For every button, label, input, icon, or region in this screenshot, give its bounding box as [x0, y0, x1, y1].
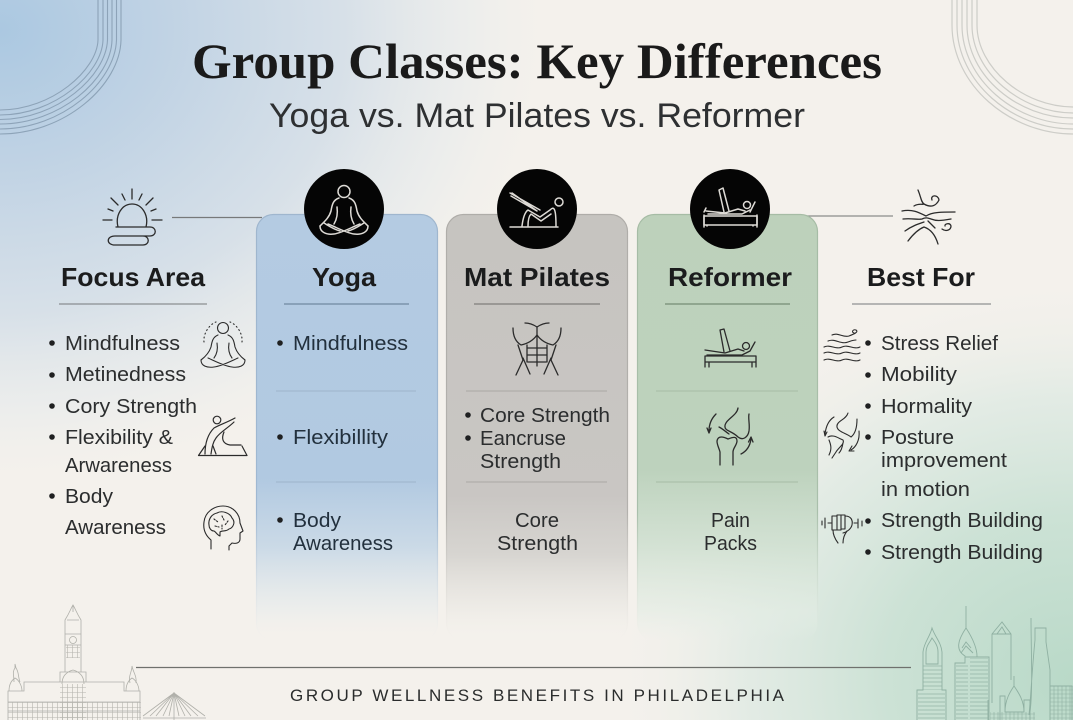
- row: pain packs: [704, 509, 757, 555]
- list: focus items: Body: [65, 485, 114, 508]
- decorative arcs: top right: [952, 0, 1073, 134]
- panel: reformer column: [638, 169, 818, 640]
- heading: best for: Best For: [867, 262, 975, 292]
- icon: breath swirl: [902, 190, 955, 244]
- heading: reformer: Reformer: [668, 262, 792, 292]
- list: best for items: Hormality: [881, 395, 973, 418]
- row: pain packs: Packs: [704, 532, 757, 555]
- icon: meditating figure: [201, 322, 245, 367]
- subtitle: Yoga vs. Mat Pilates vs. Reformer: [269, 97, 805, 135]
- footer divider: [136, 666, 911, 668]
- row: core and endurance: Strength: [480, 450, 561, 473]
- list: best for items: [865, 332, 1043, 564]
- panel: yoga column: [256, 169, 438, 640]
- row: core strength: Strength: [497, 532, 578, 555]
- list: best for items: Posture: [881, 426, 954, 449]
- list: best for items: improvement: [881, 449, 1007, 472]
- connector line: focus area: [172, 216, 262, 218]
- footer text: GROUP WELLNESS BENEFITS IN PHILADELPHIA: [290, 686, 785, 705]
- skyline: bridge: [143, 692, 206, 720]
- list: best for items: Strength Building: [881, 509, 1043, 532]
- icon: seated stretch: [198, 416, 247, 456]
- icon: rising sun on stones: [103, 189, 162, 245]
- icon: yoga badge: [304, 169, 384, 249]
- row: core strength: [497, 509, 578, 555]
- icon: knee with motion arrows: [824, 413, 859, 458]
- heading: focus area: Focus Area: [61, 262, 206, 292]
- list: focus items: Awareness: [65, 516, 166, 539]
- heading: mat pilates: Mat Pilates: [464, 262, 610, 292]
- decorative arcs: top left: [0, 0, 121, 134]
- row: body awareness: Body: [293, 509, 342, 532]
- panel: focus area: [49, 189, 247, 550]
- icon: fist with dumbbell: [822, 515, 862, 543]
- icon: mat pilates badge: [497, 169, 577, 249]
- list: best for items: Mobility: [881, 363, 958, 386]
- list: best for items: in motion: [881, 478, 970, 501]
- icon: calm waves: [824, 330, 860, 361]
- row: body awareness: [277, 509, 393, 555]
- list: focus items: Flexibility &: [65, 426, 173, 449]
- row: body awareness: Awareness: [293, 532, 393, 555]
- list: focus items: Mindfulness: [65, 332, 180, 355]
- row: core and endurance: [465, 404, 610, 473]
- row: core and endurance: Core Strength: [480, 404, 610, 427]
- icon: reformer machine: [705, 329, 756, 367]
- panel: best for: [822, 190, 1043, 564]
- list: best for items: Strength Building: [881, 541, 1043, 564]
- row: core and endurance: Eancruse: [480, 427, 566, 450]
- list: focus items: Arwareness: [65, 454, 172, 477]
- row: flexibility: Flexibillity: [293, 426, 389, 449]
- heading: yoga: Yoga: [312, 262, 377, 292]
- title: Group Classes: Key Differences: [192, 33, 882, 89]
- row: mindfulness: Mindfulness: [293, 332, 408, 355]
- skyline: philadelphia city hall: [8, 605, 141, 720]
- icon: abdominal muscles: [513, 323, 561, 375]
- list: best for items: Stress Relief: [881, 332, 998, 355]
- icon: knee joint: [707, 408, 753, 465]
- row: pain packs: Pain: [711, 509, 750, 532]
- icon: reformer badge: [690, 169, 770, 249]
- row: core strength: Core: [515, 509, 559, 532]
- connector line: best for: [806, 215, 893, 217]
- skyline: philadelphia towers: [917, 606, 1073, 720]
- list: focus items: Cory Strength: [65, 395, 197, 418]
- icon: head with brain: [204, 506, 243, 550]
- list: focus items: [49, 332, 197, 539]
- list: focus items: Metinedness: [65, 363, 186, 386]
- panel: mat pilates column: [446, 169, 628, 640]
